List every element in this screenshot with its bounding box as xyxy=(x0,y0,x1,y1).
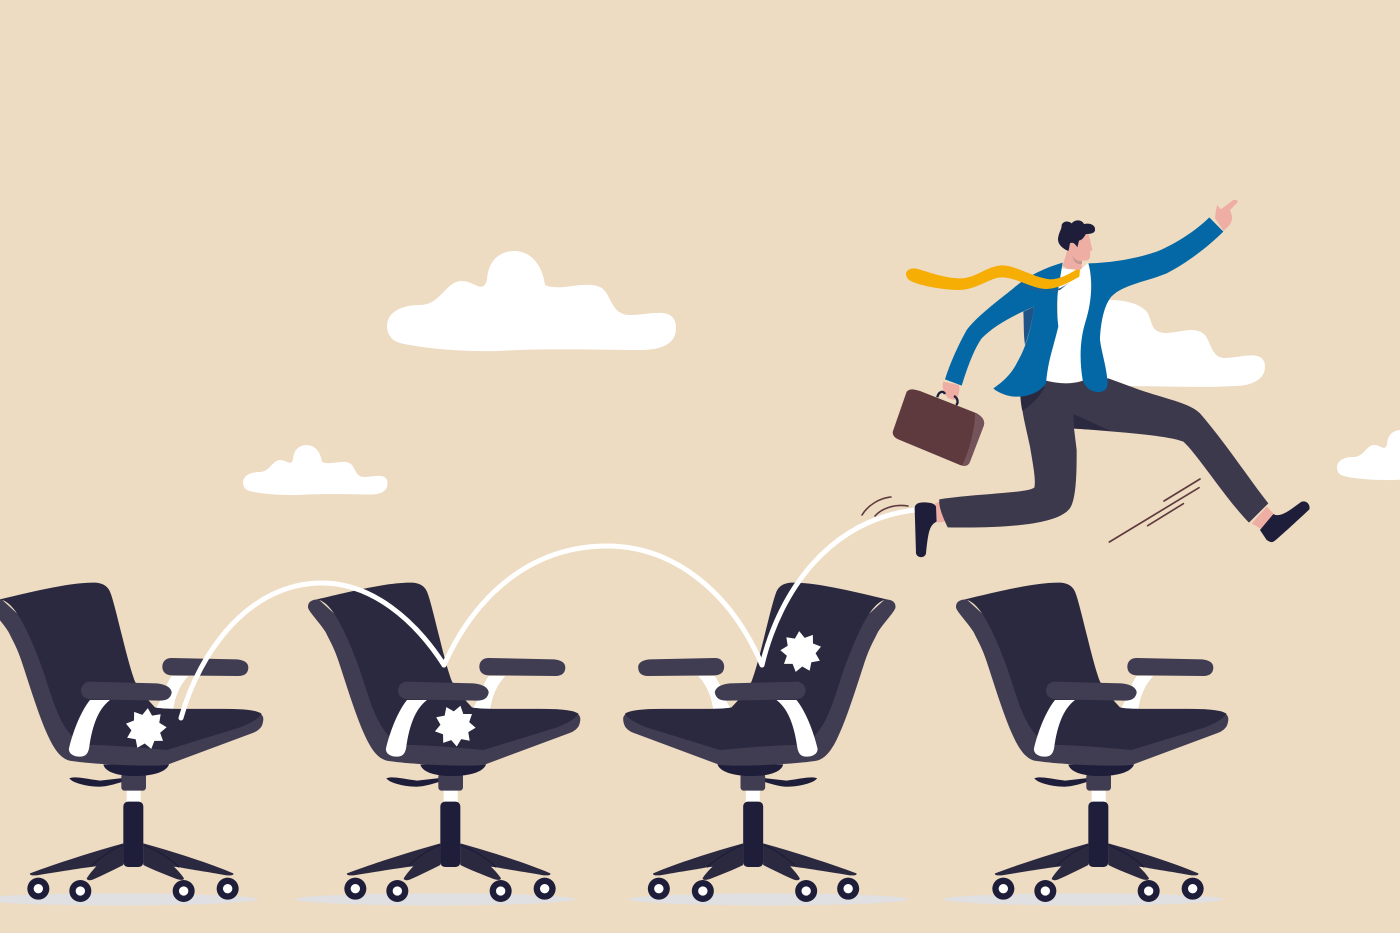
trouser shadow hip xyxy=(1020,387,1045,411)
icon: impact burst on chair 3 xyxy=(779,629,823,673)
chair 3 (mirrored) xyxy=(623,583,908,905)
businessman xyxy=(893,200,1310,557)
motion lines near back foot xyxy=(862,497,908,516)
tie xyxy=(906,265,1080,290)
briefcase handle xyxy=(937,392,958,405)
chair 4 xyxy=(943,583,1228,905)
chair 2 xyxy=(295,583,580,905)
trousers xyxy=(939,378,1268,528)
trouser shadow crotch xyxy=(1073,414,1110,431)
small cloud right edge xyxy=(1337,430,1400,480)
small cloud left xyxy=(243,445,388,495)
head and neck xyxy=(1063,233,1093,272)
shirt xyxy=(1046,263,1091,383)
hair xyxy=(1058,220,1095,251)
briefcase xyxy=(893,389,984,466)
briefcase side xyxy=(962,413,984,466)
cloud behind businessman xyxy=(1090,300,1265,387)
back ankle xyxy=(935,502,945,523)
icon: impact burst on chair 1 xyxy=(124,706,168,750)
icon: impact burst on chair 2 xyxy=(430,700,480,750)
neck shadow xyxy=(1072,256,1082,264)
tie shadow xyxy=(1018,282,1070,291)
front shoe xyxy=(1260,501,1310,542)
speed lines xyxy=(1109,479,1200,542)
jacket inner shadow xyxy=(1023,307,1034,345)
back shoe xyxy=(915,502,937,557)
left hand xyxy=(943,382,959,400)
jacket right side and raised sleeve xyxy=(1081,217,1223,392)
jacket left side and sleeve xyxy=(945,263,1063,397)
large cloud xyxy=(387,251,676,351)
arrow: bounce path across the chairs xyxy=(181,510,915,718)
chair 1 xyxy=(0,583,263,905)
right hand pointing xyxy=(1215,200,1238,231)
front ankle xyxy=(1252,507,1273,529)
